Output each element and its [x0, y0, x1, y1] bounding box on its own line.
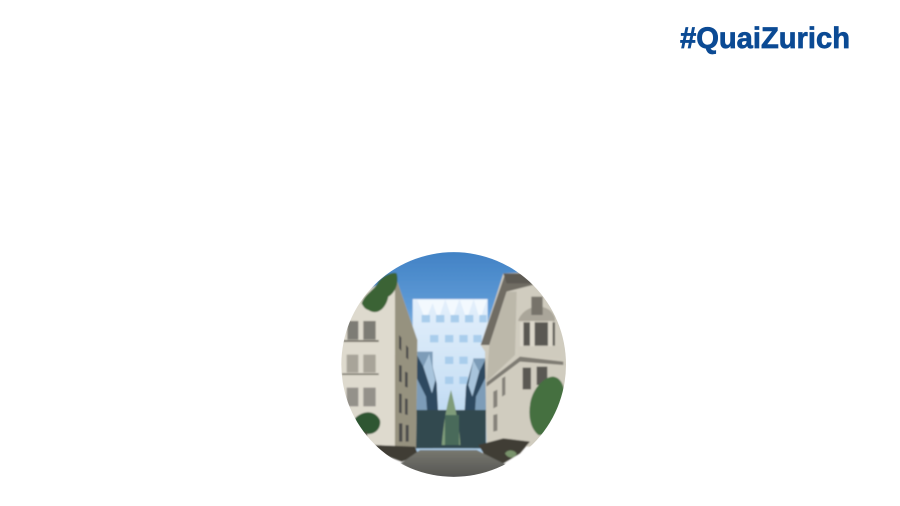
paved courtyard [400, 449, 506, 477]
right building [481, 270, 570, 448]
left building [337, 275, 417, 453]
trees [355, 273, 565, 463]
hashtag title: #QuaiZurich [680, 22, 850, 55]
glass tower [413, 299, 488, 452]
circular building photo [337, 248, 570, 482]
sky [370, 252, 520, 326]
